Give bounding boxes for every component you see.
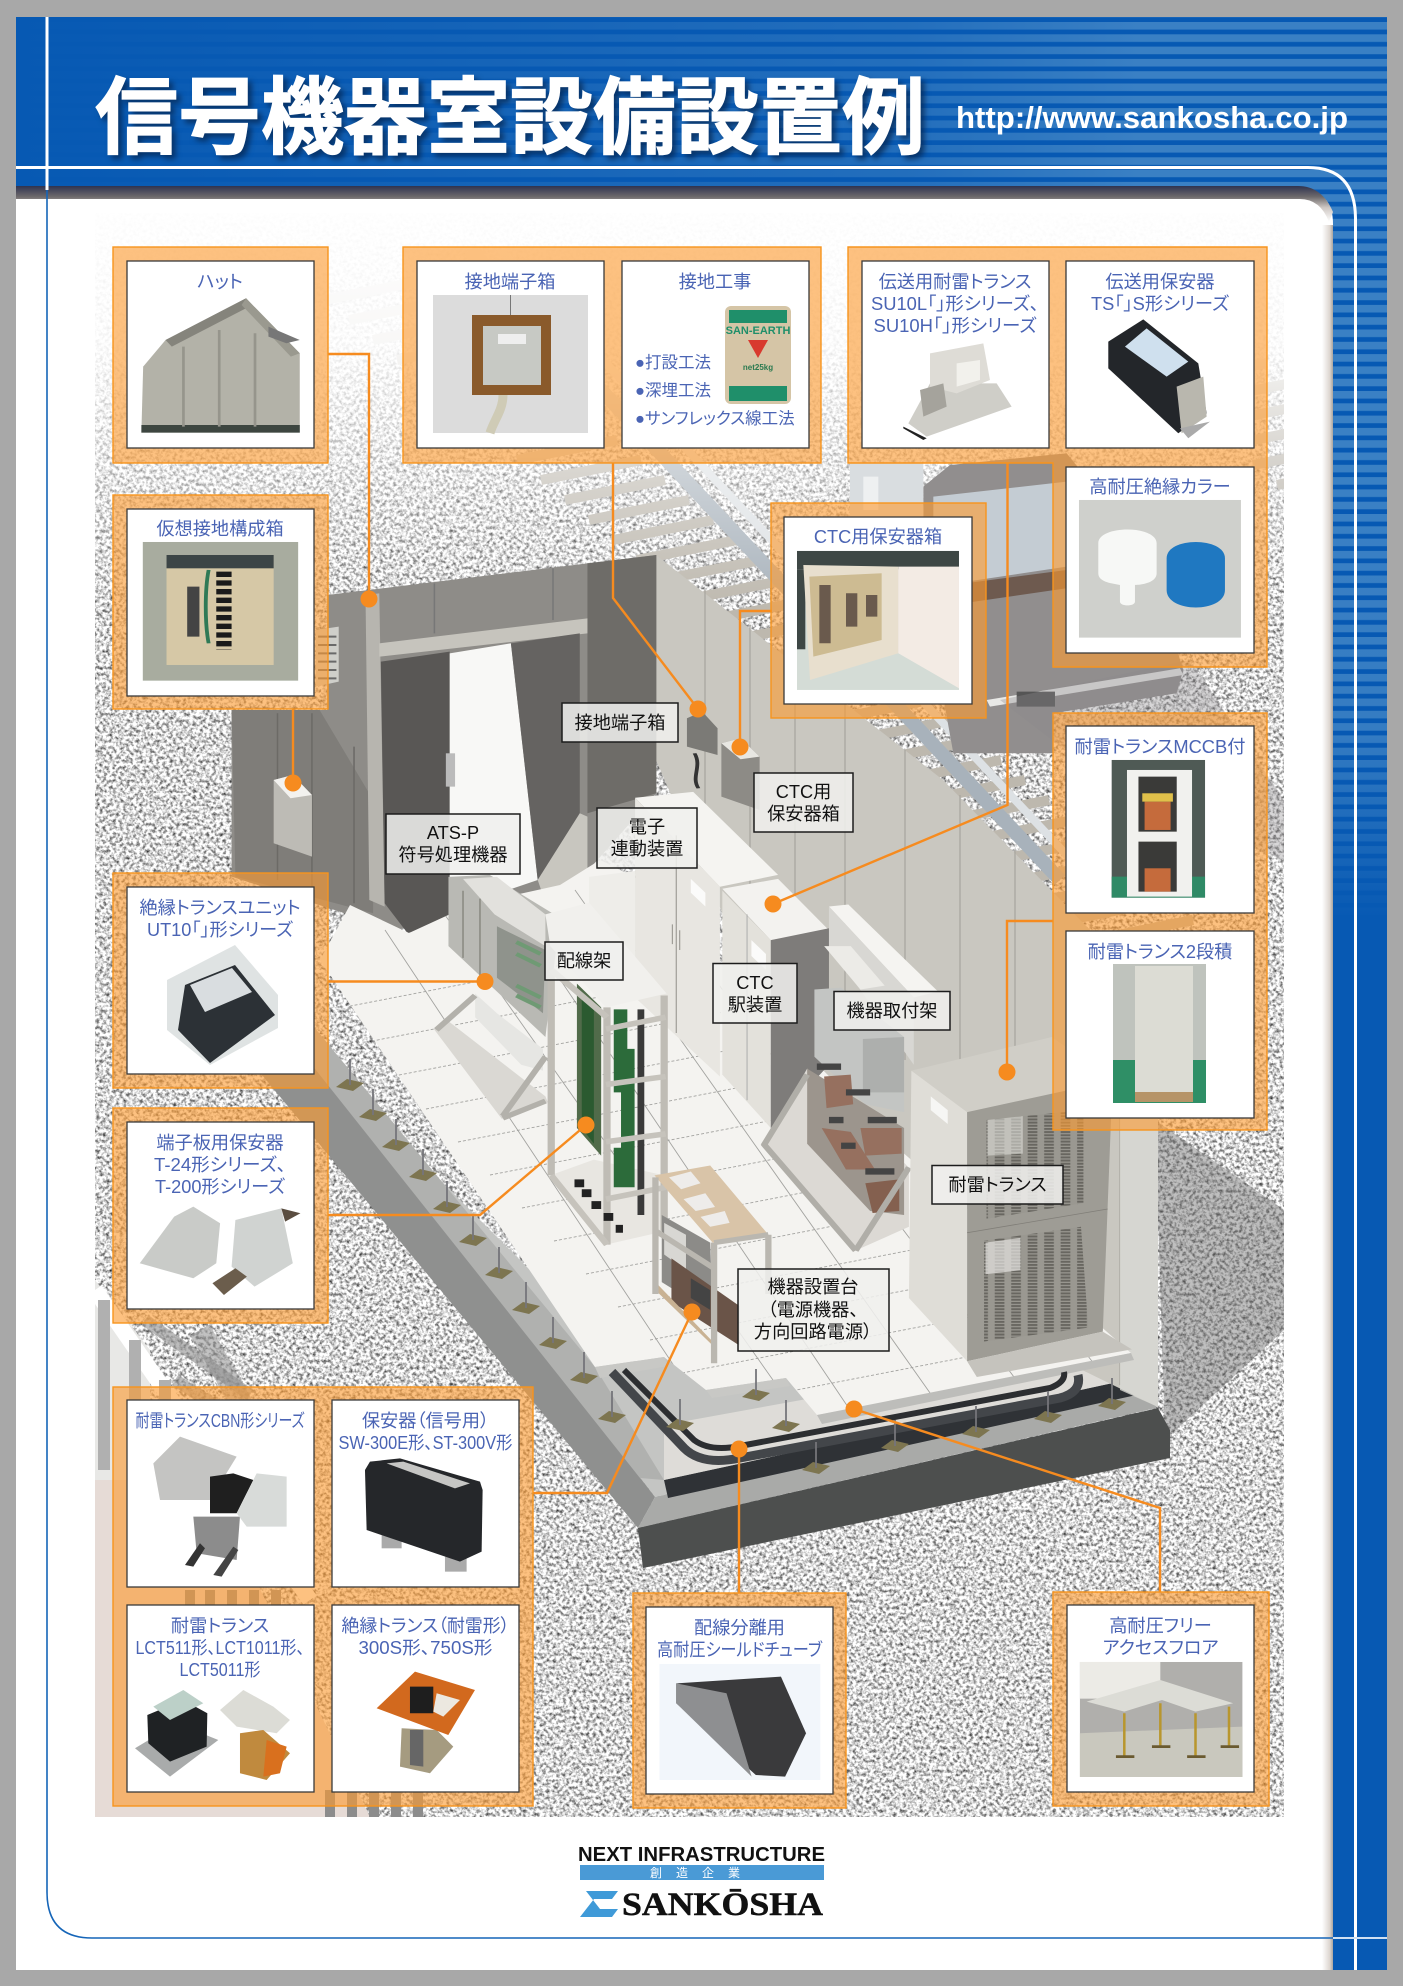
label: CTC station equipment: 駅装置	[728, 995, 782, 1015]
footer logo: 創造企業	[650, 1866, 754, 1880]
card: MCCB	[1066, 726, 1254, 913]
lower-left fence	[95, 1280, 418, 1817]
ATS-P rack	[434, 875, 558, 1119]
equipment	[434, 792, 1132, 1377]
card: CBN	[127, 1400, 314, 1587]
card: grounding terminal box	[417, 261, 604, 448]
card: MCCB: 耐雷トランスMCCB付	[1074, 737, 1246, 757]
photo: MCCB	[1112, 760, 1205, 898]
card: grounding work: 接地工事	[679, 272, 751, 292]
pedestals	[336, 1059, 1126, 1474]
leader: shield tube	[730, 1440, 748, 1593]
panel: grounding	[403, 247, 821, 463]
label: equipment stand: 方向回路電源）	[754, 1322, 872, 1342]
label: equipment stand: 機器設置台	[768, 1277, 858, 1297]
illustration: equipment room scene	[95, 258, 1284, 1817]
label: wiring rack: 配線架	[557, 951, 611, 971]
panel: terminal protector: T-24形シリーズ、	[154, 1155, 286, 1175]
label: electronic interlocking: 連動装置	[611, 839, 683, 859]
panel: terminal protector	[113, 1108, 328, 1323]
photo: TS	[1108, 319, 1210, 438]
photo: terminal box	[433, 295, 588, 433]
card: SU10 transformer: SU10H「」形シリーズ	[874, 316, 1037, 336]
panel: transmission products	[848, 247, 1267, 667]
panel: access floor: アクセスフロア	[1103, 1638, 1218, 1658]
panel: hut	[113, 247, 328, 463]
photo: hut	[141, 298, 300, 433]
pale shadow right of train	[1000, 660, 1284, 860]
railway tracks	[371, 314, 1284, 930]
card: SW-300E	[332, 1400, 519, 1587]
icon: SAN-EARTH bag: net25kg	[743, 363, 773, 372]
card: grounding terminal box: 接地端子箱	[465, 272, 555, 292]
panel: CTC protector box: CTC用保安器箱	[814, 527, 942, 547]
panel: isolation transformer unit: UT10「」形シリーズ	[147, 920, 294, 940]
leader: lightning transformers	[533, 1304, 700, 1493]
panel: isolation transformer unit: 絶縁トランスユニット	[139, 898, 301, 918]
panel: isolation transformer unit	[113, 873, 328, 1088]
card: TS protector	[1066, 261, 1254, 448]
leader: virtual ground box	[284, 709, 302, 792]
concrete ground	[95, 213, 1284, 1817]
photo: CBN	[153, 1437, 287, 1577]
card: two-stage	[1066, 931, 1254, 1118]
label: mounting rack: 機器取付架	[847, 1001, 937, 1021]
photo: 300S	[377, 1672, 475, 1773]
card: SU10 transformer: SU10L「」形シリーズ、	[871, 294, 1039, 314]
leader: CTC protector box	[732, 611, 772, 756]
photo: open enclosure	[797, 551, 959, 690]
label: equipment stand	[738, 1269, 889, 1351]
card: LCT	[127, 1605, 314, 1792]
leader: grounding terminal box	[613, 463, 706, 718]
label: CTC protector box: 保安器箱	[767, 804, 840, 824]
card: LCT: LCT5011形	[180, 1660, 260, 1680]
lightning transformer cabinet	[909, 1037, 1132, 1377]
card: SW-300E: 保安器（信号用）	[362, 1411, 489, 1431]
leader: terminal protector	[328, 1116, 594, 1215]
panel: shield tube	[633, 1593, 846, 1808]
panel: shield tube: 配線分離用	[694, 1618, 785, 1638]
label: lightning transformer	[932, 1166, 1063, 1204]
photo: UT10	[167, 945, 278, 1065]
photo: SU10	[903, 343, 1012, 440]
wiring rack	[545, 903, 667, 1245]
leader: transformer cabinet	[998, 921, 1053, 1080]
label: ATS-P: ATS-P	[427, 823, 479, 843]
leader: hut	[328, 354, 378, 608]
photo: T-24 and T-200	[140, 1207, 300, 1295]
top fade	[95, 213, 1284, 613]
leader: isolation unit	[328, 973, 494, 990]
label: wiring rack	[545, 942, 623, 980]
card: two-stage: 耐雷トランス2段積	[1088, 942, 1232, 962]
panel: terminal protector: 端子板用保安器	[156, 1133, 284, 1153]
train	[850, 453, 1183, 753]
CTC station equipment	[722, 879, 829, 1128]
card: 300S	[332, 1605, 519, 1792]
card: LCT: LCT511形、LCT1011形、	[136, 1638, 304, 1658]
label: grounding terminal box	[562, 703, 678, 742]
card: SW-300E: SW-300E形、ST-300V形	[338, 1433, 512, 1453]
panel: access floor	[1053, 1592, 1269, 1806]
panel: terminal protector: T-200形シリーズ	[155, 1177, 286, 1197]
panel: CTC protector box	[771, 503, 986, 718]
card: grounding work: ●打設工法	[635, 353, 711, 372]
label: mounting rack	[834, 992, 950, 1030]
label: equipment stand: （電源機器、	[768, 1300, 858, 1320]
label: CTC protector box	[754, 773, 853, 832]
icon: SAN-EARTH bag	[725, 306, 791, 404]
photo: enclosure	[143, 542, 298, 681]
photo: tube	[660, 1664, 820, 1780]
card: grounding work: ●サンフレックス線工法	[635, 409, 795, 428]
leader: access floor	[846, 1400, 1160, 1592]
back wall and door	[232, 555, 760, 933]
footer logo: NEXT INFRASTRUCTURE	[578, 1844, 825, 1866]
label: lightning transformer: 耐雷トランス	[948, 1175, 1047, 1195]
card: SU10 transformer	[862, 261, 1049, 448]
photo: floor	[1080, 1662, 1242, 1777]
icon: SAN-EARTH bag: SAN-EARTH	[726, 325, 790, 337]
card: LCT: 耐雷トランス	[171, 1616, 269, 1636]
label: grounding terminal box: 接地端子箱	[575, 713, 665, 733]
panel: virtual ground box: 仮想接地構成箱	[156, 519, 284, 539]
equipment stand	[654, 1166, 768, 1363]
photo: SW-300E	[365, 1458, 483, 1572]
card: 300S: 300S形、750S形	[358, 1638, 492, 1658]
panel: access floor: 高耐圧フリー	[1109, 1616, 1212, 1636]
card: TS protector: TS「」S形シリーズ	[1091, 294, 1230, 314]
right wall	[656, 555, 1158, 1407]
card: SU10 transformer: 伝送用耐雷トランス	[879, 272, 1031, 292]
panel: MCCB and two-stage transformers	[1053, 713, 1267, 1130]
panel: hut: ハット	[197, 272, 243, 292]
card: insulation collar: 高耐圧絶縁カラー	[1089, 477, 1231, 497]
card: 300S: 絶縁トランス（耐雷形）	[342, 1616, 510, 1636]
plinth	[262, 1010, 1170, 1568]
label: electronic interlocking	[597, 808, 697, 868]
raised floor	[320, 860, 1134, 1472]
title: 信号機器室設備設置例	[95, 71, 925, 165]
photo: stacked cabinet	[1113, 964, 1206, 1103]
card: CBN: 耐雷トランスCBN形シリーズ	[136, 1411, 305, 1431]
footer logo: SANKŌSHA	[622, 1887, 823, 1923]
panel: shield tube: 高耐圧シールドチューブ	[657, 1639, 823, 1660]
website url: http://www.sankosha.co.jp	[956, 100, 1348, 135]
card: grounding work: ●深埋工法	[635, 381, 711, 400]
label: ATS-P: 符号処理機器	[398, 845, 508, 865]
leader: transmission transformer	[764, 463, 1008, 912]
pipe	[612, 1370, 1079, 1460]
label: ATS-P	[386, 814, 520, 874]
photo: LCT	[135, 1690, 290, 1780]
label: CTC station equipment	[713, 964, 797, 1023]
card: insulation collar	[1066, 467, 1254, 653]
label: CTC station equipment: CTC	[736, 973, 774, 993]
building shadow right	[1155, 1120, 1284, 1440]
label: CTC protector box: CTC用	[776, 782, 831, 802]
leader lines and markers	[284, 354, 1160, 1593]
electronic interlocking cabinets	[626, 792, 778, 1076]
card: grounding work	[622, 261, 809, 448]
icon: S mark	[580, 1891, 618, 1917]
equipment mounting rack	[764, 905, 938, 1251]
footer logo	[578, 1844, 825, 1923]
panel: virtual ground box	[113, 495, 328, 709]
photo: collar	[1079, 500, 1241, 638]
label: electronic interlocking: 電子	[629, 817, 665, 837]
card: TS protector: 伝送用保安器	[1105, 272, 1215, 292]
panel: lightning transformer products	[113, 1387, 533, 1806]
